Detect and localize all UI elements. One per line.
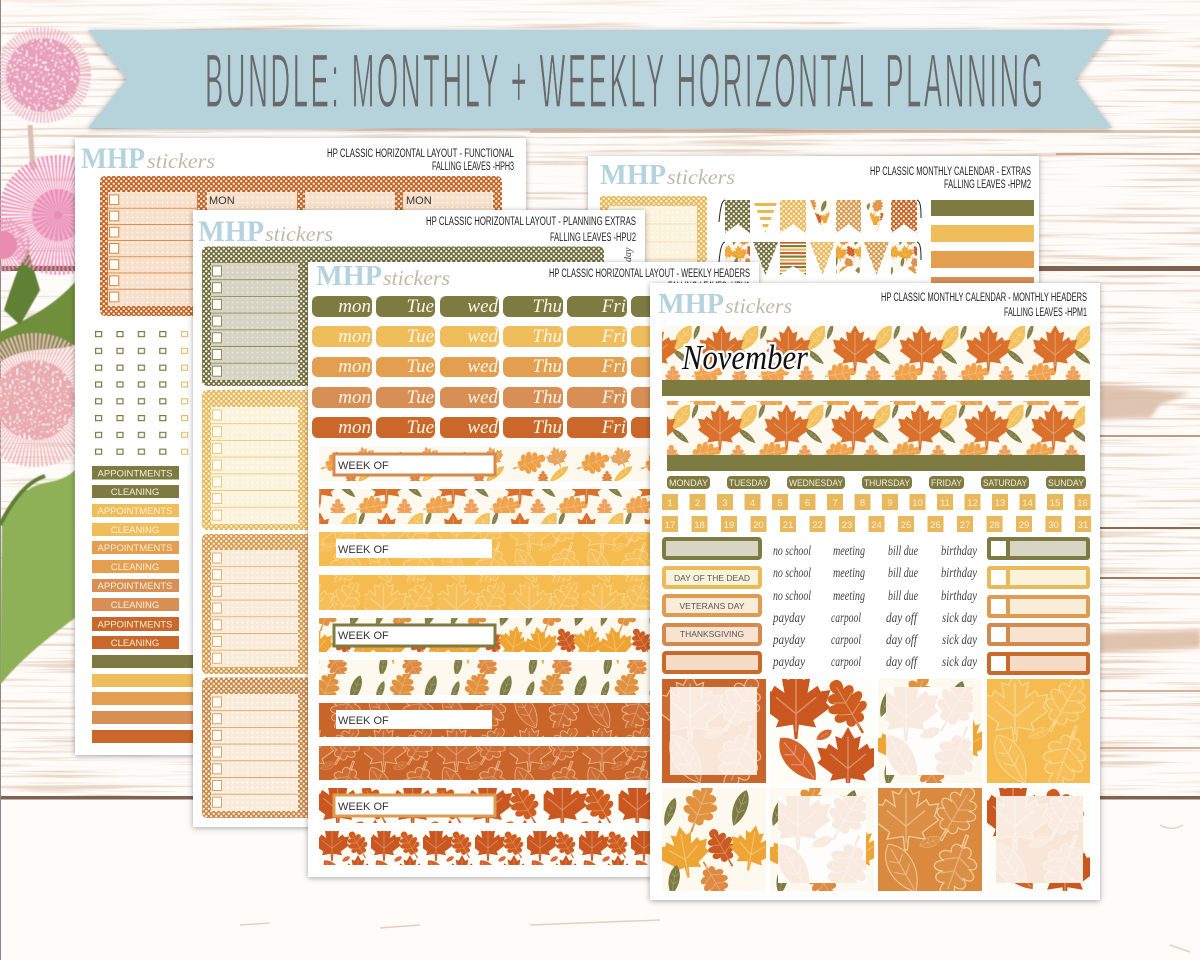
logo: MHP bbox=[658, 288, 724, 320]
script word stickers: no school bbox=[773, 589, 811, 604]
appointment and cleaning labels: APPOINTMENTS bbox=[98, 506, 172, 517]
appointment and cleaning labels: APPOINTMENTS bbox=[98, 543, 172, 554]
date squares row 2: 27 bbox=[960, 520, 970, 531]
script word stickers: sick day bbox=[942, 611, 978, 626]
week strip 9 with label bbox=[319, 788, 659, 823]
colour bars bbox=[931, 200, 1034, 293]
sheet title bbox=[549, 268, 750, 293]
sheet title: FALLING LEAVES -HPU2 bbox=[550, 232, 636, 244]
appointment and cleaning labels: CLEANING bbox=[111, 562, 159, 573]
script word stickers: day off bbox=[886, 655, 919, 670]
date squares row 1 bbox=[662, 494, 1090, 510]
weekday pills: yellow: wed bbox=[467, 326, 498, 347]
week strip 7 with label: WEEK OF bbox=[338, 715, 389, 727]
sheet title: FALLING LEAVES -HPU1 bbox=[668, 281, 750, 293]
date squares row 1: 15 bbox=[1050, 498, 1060, 509]
logo: stickers bbox=[725, 294, 792, 318]
script word stickers: day off bbox=[886, 611, 919, 626]
date squares row 1: 4 bbox=[750, 498, 755, 509]
date squares row 2: 21 bbox=[783, 520, 793, 531]
date squares row 1: 1 bbox=[667, 498, 673, 509]
icon: lower pale pink flower bbox=[0, 348, 87, 452]
date squares row 1: 16 bbox=[1077, 498, 1088, 509]
orange checklist block bbox=[202, 534, 322, 674]
November header band bbox=[662, 326, 1090, 396]
script word stickers: carpool bbox=[831, 655, 861, 670]
weekday pills: olive: Thu bbox=[532, 296, 562, 317]
sheet title: FALLING LEAVES -HPM1 bbox=[1004, 307, 1087, 319]
date squares row 2 bbox=[662, 516, 1091, 532]
weekday pills: orange: wed bbox=[467, 356, 498, 377]
icon: top pink flower bbox=[3, 35, 83, 115]
weekday pills: tan bbox=[312, 387, 691, 408]
holiday labels bbox=[664, 539, 760, 672]
date squares row 2: 29 bbox=[1019, 520, 1029, 531]
appointment and cleaning labels: CLEANING bbox=[111, 638, 159, 649]
week strip 1 with label bbox=[319, 447, 659, 481]
date squares row 1: 5 bbox=[777, 498, 783, 509]
sheet title: FALLING LEAVES -HPM2 bbox=[944, 179, 1031, 191]
date squares row 1: 2 bbox=[695, 498, 700, 509]
weekday labels: TUESDAY bbox=[729, 478, 769, 489]
script word stickers: birthday bbox=[941, 544, 978, 559]
weekday pills: rust: mon bbox=[338, 417, 371, 438]
title banner bbox=[88, 30, 1112, 128]
sheet title bbox=[426, 216, 636, 244]
weekday pills: tan: Fri bbox=[601, 387, 626, 408]
logo: MHP bbox=[316, 260, 382, 292]
weekday labels: FRIDAY bbox=[931, 478, 963, 489]
dotted yellow frame bbox=[600, 196, 707, 296]
sheet: weekly headers HPU1 bbox=[308, 260, 759, 877]
weekday pills: yellow: Tue bbox=[407, 326, 434, 347]
script word stickers bbox=[772, 544, 978, 670]
weekday pills: orange: Tue bbox=[407, 356, 434, 377]
holiday labels: THANKSGIVING bbox=[680, 629, 744, 639]
weekday pills: tan: Thu bbox=[532, 387, 562, 408]
sheet title: HP CLASSIC MONTHLY CALENDAR - MONTHLY HEADERS bbox=[881, 292, 1087, 304]
sheet title bbox=[327, 148, 514, 173]
weekday labels: SUNDAY bbox=[1048, 478, 1085, 489]
script word stickers: day off bbox=[886, 633, 919, 648]
weekday pills: olive: mon bbox=[338, 296, 371, 317]
logo bbox=[198, 215, 333, 248]
weekday pills: rust: Fri bbox=[601, 417, 626, 438]
weekday pills: orange: mon bbox=[338, 356, 371, 377]
date squares row 2: 17 bbox=[665, 520, 675, 531]
script word stickers: no school bbox=[773, 566, 811, 581]
sheet: functional HPH3 bbox=[75, 138, 526, 755]
rust strip 8 bbox=[319, 746, 659, 780]
logo: stickers bbox=[265, 222, 333, 246]
script word stickers: carpool bbox=[831, 611, 861, 626]
script word stickers: birthday bbox=[941, 566, 978, 581]
script word stickers: sick day bbox=[942, 655, 978, 670]
weekday pills: yellow: mon bbox=[338, 326, 371, 347]
date squares row 1: 9 bbox=[887, 498, 893, 509]
full box: rust frame bbox=[662, 679, 766, 783]
sheet title: HP CLASSIC HORIZONTAL LAYOUT - WEEKLY HEADERS bbox=[549, 268, 750, 280]
banner title text: BUNDLE: MONTHLY + WEEKLY HORIZONTAL PLANNING bbox=[205, 39, 1043, 124]
week strip 5 with label bbox=[319, 618, 659, 652]
sheet title: FALLING LEAVES -HPH3 bbox=[432, 161, 514, 173]
weekday labels: SATURDAY bbox=[983, 478, 1028, 489]
logo: MHP bbox=[81, 142, 145, 175]
date squares row 1: 12 bbox=[967, 498, 978, 509]
weekday pills: olive bbox=[312, 296, 691, 317]
date squares row 2: 22 bbox=[812, 520, 823, 531]
date squares row 2: 20 bbox=[753, 520, 764, 531]
script word stickers: meeting bbox=[833, 589, 865, 604]
logo: MHP bbox=[198, 215, 264, 248]
date squares row 2: 18 bbox=[694, 520, 705, 531]
full box: pale frame bbox=[878, 679, 982, 783]
weekday pills: rust: wed bbox=[467, 417, 498, 438]
holiday labels: DAY OF THE DEAD bbox=[674, 573, 750, 583]
logo bbox=[81, 142, 215, 175]
dotted weekly frame: MON bbox=[209, 195, 235, 207]
week strip 5 with label: WEEK OF bbox=[338, 630, 389, 642]
date squares row 1: 8 bbox=[860, 498, 865, 509]
script word stickers: payday bbox=[772, 611, 806, 626]
brown checklist block bbox=[202, 678, 322, 818]
date squares row 1: 14 bbox=[1022, 498, 1033, 509]
checkbox grid bbox=[95, 331, 189, 457]
leaf strip 2 bbox=[319, 489, 659, 524]
date squares row 1: 3 bbox=[722, 498, 728, 509]
week strip 9 with label: WEEK OF bbox=[338, 801, 389, 813]
script word stickers: bill due bbox=[888, 589, 918, 604]
weekday pills: rust: Tue bbox=[407, 417, 434, 438]
weekday labels: WEDNESDAY bbox=[789, 478, 844, 489]
logo bbox=[316, 260, 450, 292]
appointment and cleaning labels: APPOINTMENTS bbox=[98, 468, 172, 480]
olive checklist block bbox=[202, 246, 604, 386]
leaf strip 10 bbox=[319, 831, 659, 865]
logo bbox=[600, 159, 735, 191]
second leaf band bbox=[667, 401, 1085, 471]
logo: stickers bbox=[147, 149, 215, 173]
icon: middle pink flower bbox=[0, 173, 100, 265]
date squares row 1: 11 bbox=[940, 498, 950, 509]
weekday labels: MONDAY bbox=[669, 478, 709, 489]
holiday labels: VETERANS DAY bbox=[679, 601, 745, 611]
weekday pills: yellow bbox=[312, 326, 691, 347]
weekday pills: tan: Tue bbox=[407, 387, 434, 408]
date squares row 2: 31 bbox=[1078, 520, 1088, 531]
appointment and cleaning labels: CLEANING bbox=[111, 525, 159, 536]
weekday pills: yellow: Thu bbox=[532, 326, 562, 347]
week strip 3 with label: WEEK OF bbox=[338, 544, 389, 556]
full box: pale with rust frame bbox=[987, 788, 1090, 891]
full box: mixed leaves bbox=[662, 788, 766, 891]
script word stickers: no school bbox=[773, 544, 811, 559]
script word stickers: carpool bbox=[831, 633, 861, 648]
weekday pills: olive: Fri bbox=[601, 296, 626, 317]
sheet title bbox=[881, 292, 1087, 319]
date squares row 1: 6 bbox=[805, 498, 810, 509]
script word stickers: bill due bbox=[888, 544, 918, 559]
date squares row 2: 19 bbox=[724, 520, 734, 531]
logo: stickers bbox=[667, 165, 735, 189]
weekday labels: THURSDAY bbox=[864, 478, 911, 489]
full box: pale with orange frame bbox=[770, 788, 874, 891]
week strip 1 with label: WEEK OF bbox=[338, 460, 389, 472]
date squares row 1: 13 bbox=[995, 498, 1005, 509]
checkbox labels bbox=[989, 539, 1088, 673]
weekday labels bbox=[667, 476, 1086, 489]
November header band: November bbox=[681, 338, 808, 377]
weekday pills: tan: mon bbox=[338, 387, 371, 408]
weekday pills: orange: Thu bbox=[532, 356, 562, 377]
colour bars bbox=[92, 655, 202, 743]
weekday pills: tan: wed bbox=[467, 387, 498, 408]
week strip 3 with label bbox=[319, 532, 659, 566]
full box: maple leaves bbox=[770, 679, 874, 783]
sheet: extras HPM2 bbox=[588, 156, 1039, 696]
decorative flowers and leaves bbox=[0, 35, 100, 685]
weekday pills: olive: wed bbox=[467, 296, 498, 317]
sheet: planning extras HPU2 bbox=[193, 210, 645, 827]
weekday pills: orange bbox=[312, 356, 691, 377]
appointment and cleaning labels: APPOINTMENTS bbox=[98, 620, 172, 630]
sheet: monthly headers HPM1 bbox=[650, 283, 1100, 900]
script word stickers: payday bbox=[772, 633, 806, 648]
date squares row 2: 24 bbox=[871, 520, 882, 531]
date squares row 2: 23 bbox=[842, 520, 852, 531]
yellow strip 4 bbox=[319, 575, 659, 610]
script word stickers: meeting bbox=[833, 566, 865, 581]
appointment and cleaning labels: CLEANING bbox=[111, 600, 159, 611]
script word stickers: birthday bbox=[941, 589, 978, 604]
script word stickers: bill due bbox=[888, 566, 918, 581]
date squares row 1: 7 bbox=[832, 498, 838, 509]
yellow checklist block bbox=[202, 390, 322, 530]
date squares row 2: 26 bbox=[930, 520, 941, 531]
full box: orange outlines bbox=[878, 788, 982, 891]
sheet title: HP CLASSIC HORIZONTAL LAYOUT - PLANNING EXTRAS bbox=[426, 216, 636, 228]
leaf strip 6 bbox=[319, 660, 659, 695]
week strip 7 with label bbox=[319, 703, 659, 737]
logo: stickers bbox=[383, 266, 450, 290]
script word stickers: payday bbox=[772, 655, 806, 670]
pennant banners bbox=[719, 200, 921, 275]
dotted weekly frame bbox=[100, 176, 502, 316]
weekday pills: olive: Tue bbox=[407, 296, 434, 317]
logo: MHP bbox=[600, 159, 666, 191]
date squares row 2: 28 bbox=[989, 520, 1000, 531]
appointment and cleaning labels bbox=[92, 466, 179, 649]
rotated script word: day bbox=[623, 247, 634, 262]
sheet title bbox=[870, 166, 1031, 191]
weekday pills: yellow: Fri bbox=[601, 326, 626, 347]
weekday pills: rust: Thu bbox=[532, 417, 562, 438]
weekday pills: orange: Fri bbox=[601, 356, 626, 377]
script word stickers: sick day bbox=[942, 633, 978, 648]
full box: yellow outlines bbox=[987, 679, 1090, 783]
date squares row 2: 25 bbox=[901, 520, 911, 531]
sheet title: HP CLASSIC HORIZONTAL LAYOUT - FUNCTIONAL bbox=[327, 148, 514, 160]
sheet title: HP CLASSIC MONTHLY CALENDAR - EXTRAS bbox=[870, 166, 1031, 178]
script word stickers: meeting bbox=[833, 544, 865, 559]
date squares row 1: 10 bbox=[912, 498, 923, 509]
logo bbox=[658, 288, 792, 320]
appointment and cleaning labels: APPOINTMENTS bbox=[98, 581, 172, 592]
dotted weekly frame: MON bbox=[406, 195, 432, 207]
appointment and cleaning labels: CLEANING bbox=[111, 487, 159, 498]
date squares row 2: 30 bbox=[1048, 520, 1059, 531]
weekday pills: rust bbox=[312, 417, 691, 438]
